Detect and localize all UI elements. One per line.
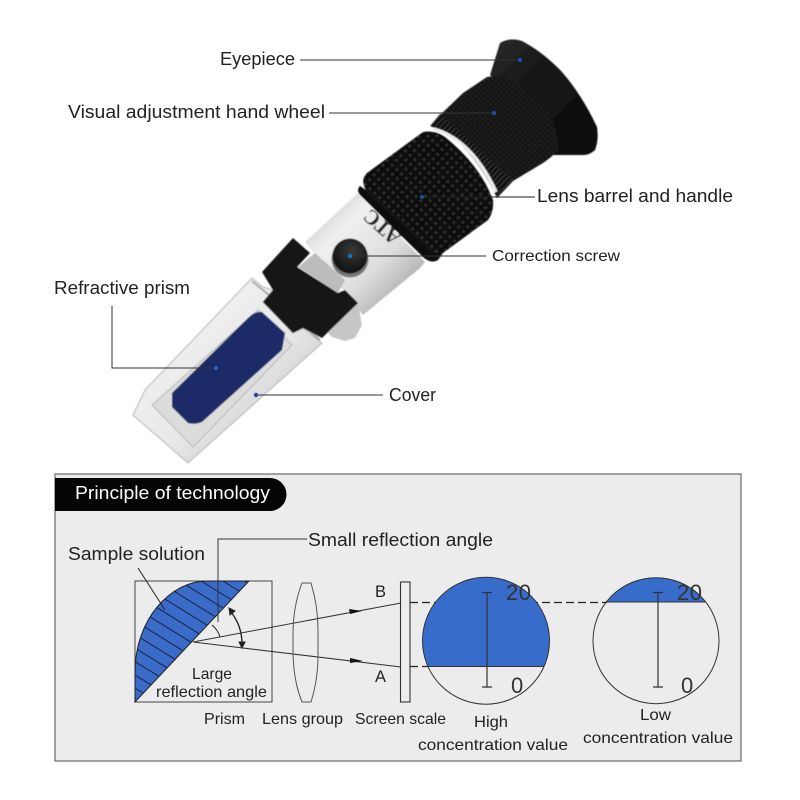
device: ATC engraving: ATC [358, 204, 406, 250]
device: silver clip [298, 253, 345, 293]
device: eyepiece cup [490, 39, 598, 155]
component labels: Prism [204, 711, 245, 728]
callout: refractive prism [54, 278, 218, 370]
prism outline [135, 581, 272, 702]
label: high concentration value: concentration value [418, 737, 568, 754]
device: silver body [305, 193, 425, 315]
callout: refractive prism: Refractive prism [54, 278, 190, 298]
view circle: low concentration: 20 [677, 580, 702, 605]
lens group [293, 583, 318, 702]
device: visual adjustment wheel [438, 76, 558, 181]
ray labels: B [375, 582, 386, 601]
callout: correction screw [348, 248, 620, 265]
label: low concentration value [583, 707, 733, 747]
view circle: low concentration [593, 578, 719, 704]
diagram: prism with sample solution [134, 580, 272, 704]
device: blue prism [172, 312, 285, 424]
ray labels: A [375, 667, 387, 686]
heading: principle of technology [55, 478, 286, 511]
view circle: high concentration: 0 [511, 673, 523, 698]
component labels: Lens group [262, 711, 343, 728]
view circle: high concentration: 20 [506, 580, 531, 605]
label: sample solution [68, 544, 205, 610]
callout: correction screw: Correction screw [492, 248, 620, 265]
device: knurled barrel [363, 132, 493, 253]
label: low concentration value: Low [640, 707, 671, 724]
ray labels [375, 582, 387, 686]
sample solution outline [135, 581, 249, 702]
view circle: low concentration: 0 [681, 673, 693, 698]
label: low concentration value: concentration value [583, 730, 733, 747]
device: silver ring [434, 129, 496, 192]
callout: eyepiece [220, 49, 522, 69]
device: correction screw [332, 238, 368, 278]
sample solution fill [135, 581, 249, 702]
label: large reflection angle [156, 666, 267, 701]
refractometer photo illustration [133, 39, 598, 463]
panel: principle of technology [55, 474, 741, 765]
callout: cover: Cover [389, 385, 436, 405]
callout: lens barrel and handle [420, 186, 733, 206]
view circle: high concentration [422, 577, 550, 704]
label: high concentration value [418, 714, 568, 754]
callout: lens barrel and handle: Lens barrel and handle [537, 186, 733, 206]
device: cover tray [152, 310, 292, 447]
label: large reflection angle: Large [192, 666, 232, 683]
panel background [55, 474, 741, 761]
angle arcs [212, 608, 245, 648]
dashed projection lines [410, 602, 607, 666]
device: lower bump [325, 303, 362, 341]
component labels [204, 711, 446, 728]
label: small reflection angle: Small reflection angle [308, 530, 493, 550]
device: clear cover [133, 278, 322, 463]
heading: principle of technology: Principle of technology [75, 483, 270, 503]
device: black hinge [262, 238, 358, 338]
label: sample solution: Sample solution [68, 544, 205, 564]
device: ribbed collar [430, 114, 513, 198]
component labels: Screen scale [355, 711, 446, 728]
light rays with arrows [193, 603, 401, 667]
callout: cover [254, 385, 436, 405]
callout: visual adjustment hand wheel: Visual adjustment hand wheel [68, 102, 325, 122]
sample solution hatching [136, 582, 248, 694]
device: black band [358, 186, 443, 262]
screen scale [400, 582, 410, 702]
callout: visual adjustment hand wheel [68, 102, 496, 122]
device: cover notches [252, 281, 320, 340]
callout: eyepiece: Eyepiece [220, 49, 295, 69]
label: high concentration value: High [474, 714, 508, 731]
label: small reflection angle [218, 530, 493, 622]
label: large reflection angle: reflection angle [156, 684, 267, 701]
